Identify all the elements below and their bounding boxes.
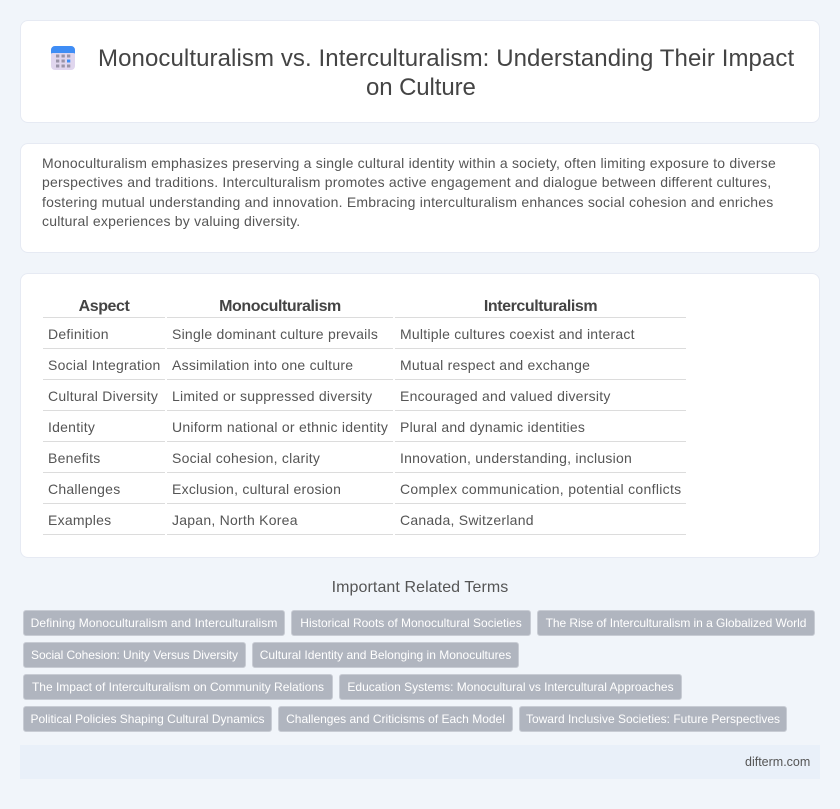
panel: introduction [20,143,820,253]
related term tags: Historical Roots of Monocultural Societies [300,616,522,630]
panel: comparison table [20,273,820,558]
intro text [42,154,776,229]
related term tags: The Rise of Interculturalism in a Globalized World [546,616,806,630]
related term tags: The Impact of Interculturalism on Community Relations [32,680,324,694]
comparison table: Social Integration [48,357,160,373]
comparison table: Assimilation into one culture [172,357,353,373]
comparison table: Interculturalism [484,298,597,315]
related term tags: Defining Monoculturalism and Interculturalism [31,616,277,630]
comparison table: Innovation, understanding, inclusion [400,450,632,466]
comparison table: Examples [48,512,111,528]
intro text: Monoculturalism emphasizes preserving a single cultural identity within a society, often limiting exposure to diverse [42,154,776,170]
intro text: cultural experiences by valuing diversity. [42,213,300,229]
related term tags: Cultural Identity and Belonging in Monocultures [260,648,511,662]
comparison table: Mutual respect and exchange [400,357,590,373]
title: Monoculturalism vs. Interculturalism: Understanding Their Impact [98,45,794,72]
related terms heading: Important Related Terms [332,579,508,596]
related term tags [23,610,815,732]
panel: header [20,20,820,123]
comparison table [43,298,686,535]
comparison table: Cultural Diversity [48,388,158,404]
icon: calendar [51,46,75,70]
comparison table: Definition [48,326,109,342]
comparison table: Benefits [48,450,101,466]
comparison table: Japan, North Korea [172,512,298,528]
comparison table: Multiple cultures coexist and interact [400,326,635,342]
comparison table: Aspect [79,298,129,315]
related term tags: Political Policies Shaping Cultural Dynamics [30,712,265,726]
intro text: fostering mutual understanding and innovation. Embracing interculturalism enhances social cohesion and enriches [42,194,774,210]
comparison table: Social cohesion, clarity [172,450,320,466]
related term tags: Toward Inclusive Societies: Future Perspectives [526,712,780,726]
comparison table: Exclusion, cultural erosion [172,481,341,497]
comparison table: Uniform national or ethnic identity [172,419,388,435]
comparison table: Encouraged and valued diversity [400,388,611,404]
comparison table: Canada, Switzerland [400,512,534,528]
comparison table: Plural and dynamic identities [400,419,585,435]
comparison table: Identity [48,419,95,435]
comparison table: Single dominant culture prevails [172,326,378,342]
footer source: difterm.com [745,755,810,769]
comparison table: Monoculturalism [219,298,341,315]
title [98,45,794,101]
comparison table: Complex communication, potential conflicts [400,481,681,497]
intro text: perspectives and traditions. Interculturalism promotes active engagement and dialogue between different cultures, [42,174,771,190]
related term tags: Education Systems: Monocultural vs Intercultural Approaches [347,680,674,694]
comparison table: Challenges [48,481,120,497]
related term tags: Social Cohesion: Unity Versus Diversity [31,648,238,662]
comparison table: Limited or suppressed diversity [172,388,372,404]
related term tags: Challenges and Criticisms of Each Model [286,712,505,726]
footer bar [20,745,820,779]
title: on Culture [366,74,476,101]
